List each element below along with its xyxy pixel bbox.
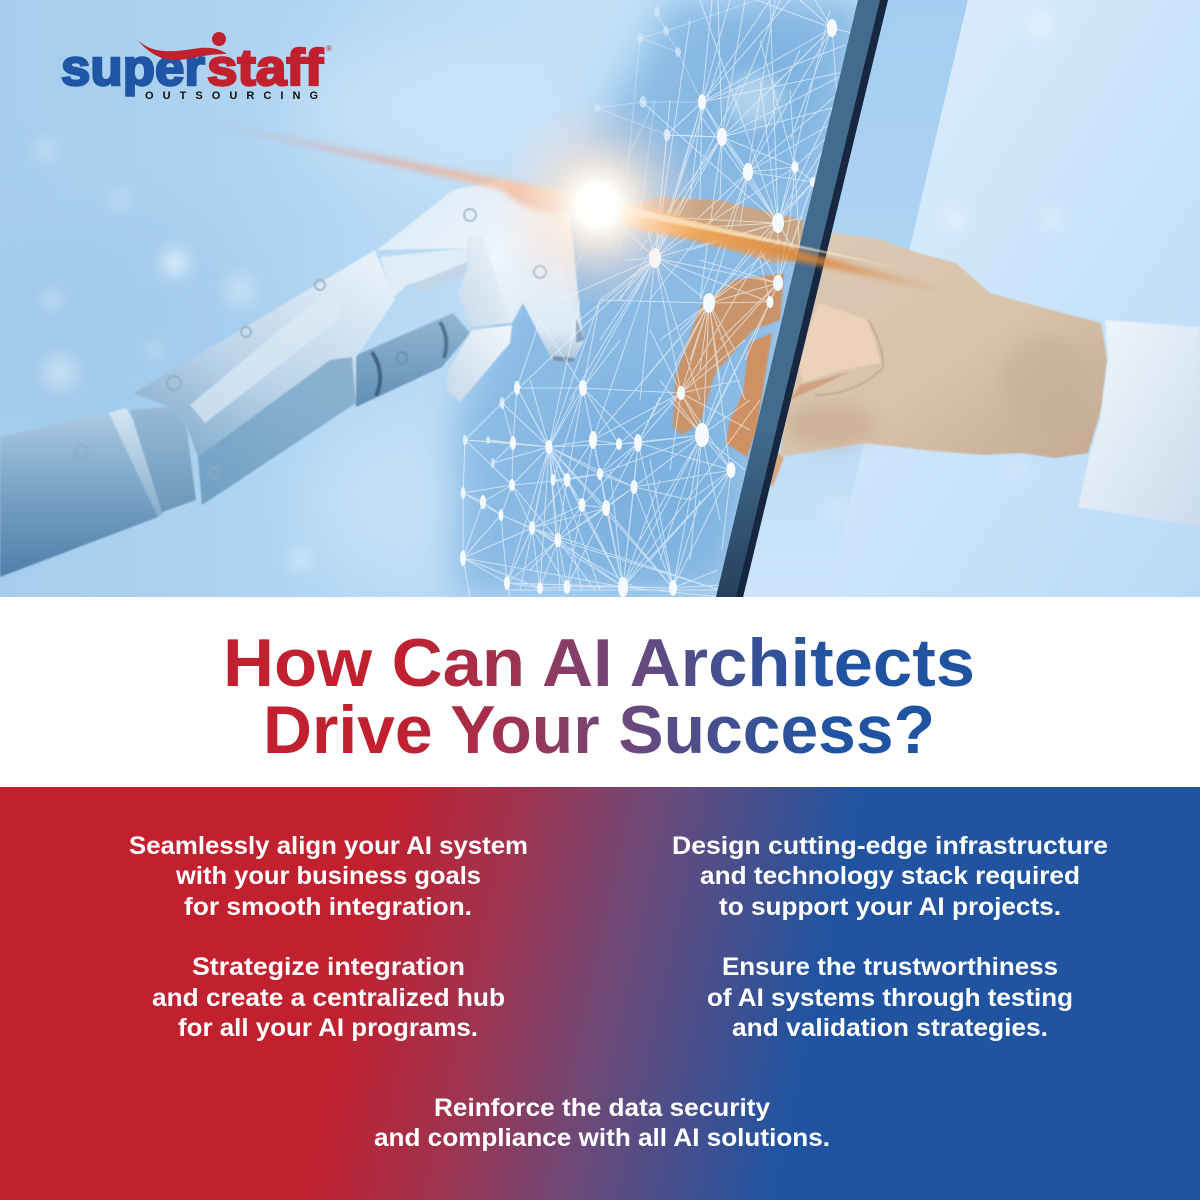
network screen tint xyxy=(455,0,870,597)
text block: data security: Reinforce the data security xyxy=(434,1094,770,1122)
orange reflection on fingertip xyxy=(502,187,562,214)
logo: superstaff outsourcing xyxy=(61,32,332,102)
front finger upper segment xyxy=(458,235,512,327)
human hand: fingers behind the screen xyxy=(623,197,803,457)
registered mark: ® xyxy=(326,44,332,53)
title: How Can AI Architects xyxy=(223,625,975,701)
text block: align goals: for smooth integration. xyxy=(184,893,472,921)
main plate xyxy=(134,250,395,505)
gap between screen and glass pane xyxy=(743,0,968,597)
screen bezel xyxy=(716,0,888,597)
hero photo: robot and human hands xyxy=(0,0,1200,597)
text block: infrastructure: to support your AI projects. xyxy=(719,893,1061,921)
glass pane right of the screen xyxy=(828,0,1200,597)
text block: infrastructure: and technology stack required xyxy=(700,862,1080,890)
title band xyxy=(0,597,1200,787)
text block: integration hub: Strategize integration xyxy=(192,953,465,981)
logo swoosh xyxy=(135,37,227,60)
back of hand and rear fingers xyxy=(378,180,582,330)
photo background xyxy=(0,0,968,597)
text block: align goals: Seamlessly align your AI system xyxy=(129,832,528,860)
text block: integration hub: for all your AI programs. xyxy=(178,1014,478,1042)
logo dot xyxy=(212,32,226,46)
front finger tip xyxy=(447,325,512,402)
forearm xyxy=(0,413,158,577)
shirt sleeve xyxy=(1078,320,1200,527)
network mesh xyxy=(460,0,860,597)
wrist ring xyxy=(108,408,164,517)
faded upper-left mesh xyxy=(575,0,757,268)
wrist joint xyxy=(130,407,196,512)
text block: trustworthiness: Ensure the trustworthiness xyxy=(722,953,1058,981)
robot arm xyxy=(0,180,585,577)
text block: align goals: with your business goals xyxy=(175,862,481,890)
logo wordmark blue: super xyxy=(61,39,205,96)
human hand and palm xyxy=(768,232,1107,488)
logo wordmark red: staff xyxy=(207,39,324,96)
main mesh lines xyxy=(463,0,860,597)
text block: integration hub: and create a centralized hub xyxy=(152,984,505,1012)
bottom gradient panel xyxy=(0,787,1200,1200)
logo tagline: OUTSOURCING xyxy=(145,90,318,102)
text block: trustworthiness: and validation strategies. xyxy=(732,1014,1048,1042)
text block: trustworthiness: of AI systems through testing xyxy=(707,984,1073,1012)
palm pad xyxy=(798,303,881,382)
light beam and flare xyxy=(246,111,930,302)
rear robot segment xyxy=(352,313,470,407)
palm xyxy=(380,248,467,298)
text block: data security: and compliance with all AI solutions. xyxy=(374,1124,830,1152)
text block: infrastructure: Design cutting-edge infrastructure xyxy=(672,832,1108,860)
title: Drive Your Success? xyxy=(263,692,935,768)
network nodes xyxy=(460,7,837,597)
pane bokeh xyxy=(825,13,1062,520)
